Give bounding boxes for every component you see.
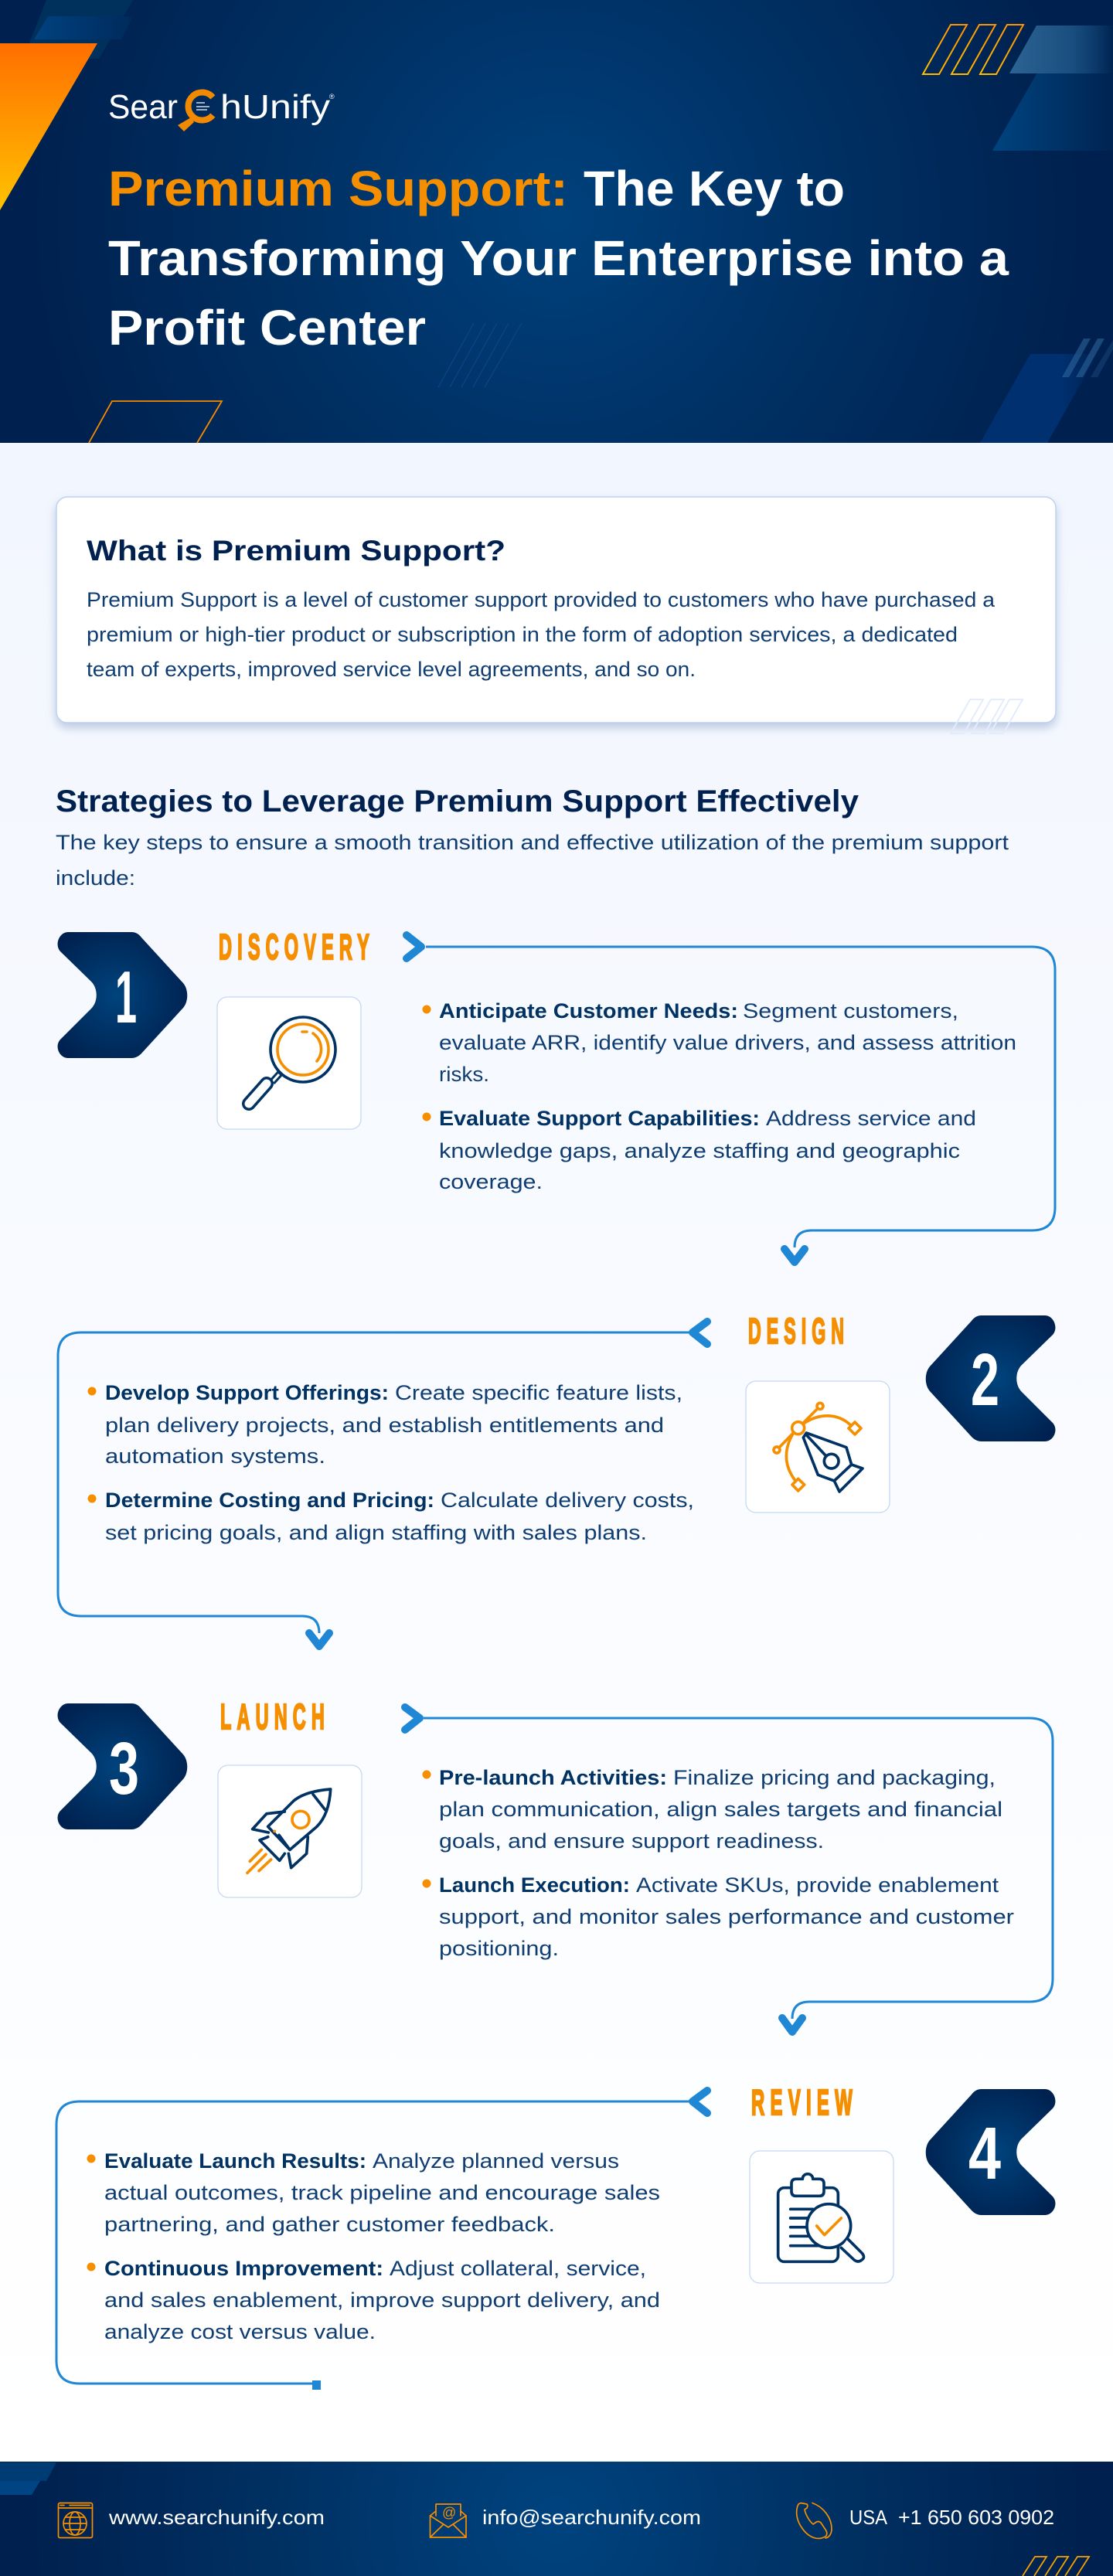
logo: SearchUnify: Sear bbox=[108, 88, 178, 126]
heading: design: DESIGN bbox=[748, 1311, 849, 1351]
bullet list: design: set pricing goals, and align staffing with sales plans. bbox=[105, 1521, 647, 1544]
number badge 2: 2 bbox=[971, 1339, 999, 1421]
icon: website globe bbox=[59, 2503, 93, 2538]
number badge 2 bbox=[926, 1315, 1055, 1441]
icon: email envelope: @ bbox=[442, 2505, 456, 2520]
bullet list: review: Adjust collateral, service, bbox=[390, 2257, 646, 2280]
phone text: USA bbox=[849, 2506, 888, 2529]
email text: info@searchunify.com bbox=[482, 2506, 701, 2529]
bullet list: launch: support, and monitor sales performance and customer bbox=[439, 1905, 1014, 1928]
bullet list: discovery bbox=[422, 999, 1016, 1193]
bullet list: launch: Pre-launch Activities: bbox=[439, 1766, 667, 1789]
header banner bbox=[0, 0, 1113, 443]
heading: discovery: DISCOVERY bbox=[219, 927, 375, 967]
bullet list: discovery: Evaluate Support Capabilities: bbox=[439, 1107, 760, 1130]
strategies intro text bbox=[56, 831, 1009, 890]
bullet list: launch: plan communication, align sales targets and financial bbox=[439, 1798, 1002, 1821]
bullet list: design: automation systems. bbox=[105, 1445, 325, 1468]
definition text: team of experts, improved service level agreements, and so on. bbox=[87, 658, 696, 681]
step 1: discovery bbox=[58, 927, 1055, 1262]
panel: what is premium support bbox=[56, 497, 1056, 733]
bullet list: launch: goals, and ensure support readiness. bbox=[439, 1829, 824, 1853]
heading: strategies: Strategies to Leverage Premium Support Effectively bbox=[56, 784, 859, 818]
bullet list: launch: positioning. bbox=[439, 1937, 559, 1960]
footer bbox=[0, 2462, 1113, 2576]
step 4: review bbox=[56, 2082, 1055, 2390]
icon: pen tool bbox=[746, 1381, 890, 1513]
number badge 3 bbox=[58, 1703, 187, 1829]
bullet list: design: Determine Costing and Pricing: bbox=[105, 1489, 434, 1512]
bullet list: review: Evaluate Launch Results: bbox=[104, 2149, 366, 2173]
bullet list: design bbox=[88, 1381, 694, 1544]
bullet list: review: actual outcomes, track pipeline and encourage sales bbox=[104, 2181, 660, 2204]
connector arrow bbox=[405, 1707, 1053, 2032]
connector arrow bbox=[407, 935, 1055, 1262]
bullet list: review: and sales enablement, improve support delivery, and bbox=[104, 2288, 660, 2312]
strategies intro text: include: bbox=[56, 866, 135, 890]
bullet list: launch bbox=[422, 1766, 1014, 1960]
phone text: +1 650 603 0902 bbox=[898, 2506, 1054, 2529]
bullet list: design: plan delivery projects, and establish entitlements and bbox=[105, 1414, 664, 1437]
icon: magnifying glass bbox=[217, 997, 361, 1129]
logo: SearchUnify: hUnify bbox=[220, 88, 330, 126]
bullet list: discovery: Address service and bbox=[766, 1107, 976, 1130]
step 2: design bbox=[58, 1311, 1055, 1646]
title: The Key to bbox=[584, 161, 845, 216]
bullet list: discovery: Segment customers, bbox=[743, 999, 958, 1023]
bullet list: discovery: Anticipate Customer Needs: bbox=[439, 999, 738, 1023]
icon: clipboard with magnifier bbox=[750, 2151, 893, 2283]
bullet list: review bbox=[87, 2149, 660, 2343]
page background bbox=[0, 443, 1113, 2462]
heading: review: REVIEW bbox=[751, 2082, 858, 2122]
definition text bbox=[87, 588, 995, 681]
title: Profit Center bbox=[108, 300, 426, 356]
heading: launch: LAUNCH bbox=[220, 1696, 330, 1737]
bullet list: discovery: coverage. bbox=[439, 1170, 543, 1193]
step 3: launch bbox=[58, 1696, 1053, 2032]
bullet list: launch: Activate SKUs, provide enablement bbox=[636, 1873, 999, 1897]
bullet list: discovery: evaluate ARR, identify value drivers, and assess attrition bbox=[439, 1031, 1016, 1054]
definition text: premium or high-tier product or subscription in the form of adoption services, a dedicated bbox=[87, 623, 958, 646]
number badge 1: 1 bbox=[115, 956, 137, 1039]
number badge 4: 4 bbox=[968, 2112, 1001, 2195]
logo: SearchUnify: ® bbox=[329, 93, 335, 100]
bullet list: review: partnering, and gather customer feedback. bbox=[104, 2213, 555, 2236]
website text: www.searchunify.com bbox=[108, 2506, 325, 2529]
bullet list: launch: Finalize pricing and packaging, bbox=[673, 1766, 996, 1789]
logo: SearchUnify bbox=[108, 88, 335, 131]
bullet list: design: Develop Support Offerings: bbox=[105, 1381, 389, 1404]
icon: rocket bbox=[218, 1765, 362, 1897]
bullet list: design: Calculate delivery costs, bbox=[441, 1489, 694, 1512]
bullet list: review: Continuous Improvement: bbox=[104, 2257, 383, 2280]
number badge 1 bbox=[58, 932, 187, 1058]
bullet list: discovery: risks. bbox=[439, 1063, 489, 1086]
icon: phone bbox=[797, 2503, 832, 2538]
title: Premium Support: bbox=[108, 161, 568, 216]
bullet list: launch: Launch Execution: bbox=[439, 1873, 630, 1897]
bullet list: review: Analyze planned versus bbox=[373, 2149, 619, 2173]
connector arrow bbox=[58, 1322, 707, 1646]
number badge 4 bbox=[926, 2089, 1055, 2215]
bullet list: review: analyze cost versus value. bbox=[104, 2320, 376, 2343]
bullet list: design: Create specific feature lists, bbox=[395, 1381, 682, 1404]
strategies intro text: The key steps to ensure a smooth transition and effective utilization of the premium support bbox=[56, 831, 1009, 854]
bullet list: discovery: knowledge gaps, analyze staffing and geographic bbox=[439, 1139, 960, 1162]
title: Transforming Your Enterprise into a bbox=[108, 230, 1009, 286]
connector line bbox=[56, 2091, 707, 2390]
title bbox=[108, 161, 1009, 356]
heading: what is premium support: What is Premium Support? bbox=[87, 535, 505, 567]
icon: email envelope bbox=[430, 2504, 466, 2537]
number badge 3: 3 bbox=[109, 1727, 139, 1810]
definition text: Premium Support is a level of customer support provided to customers who have purchased a bbox=[87, 588, 995, 611]
